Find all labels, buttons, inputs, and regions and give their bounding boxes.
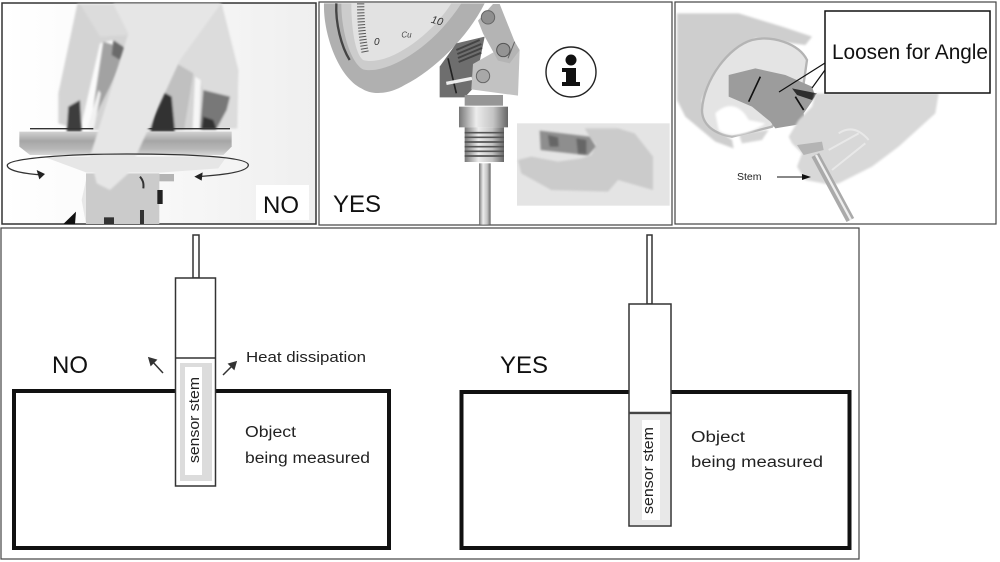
label: object being measured, right: [691, 429, 823, 471]
hands holding gauge: [677, 13, 812, 148]
hand gripping the case: [7, 4, 248, 224]
label: heat dissipation: Heat dissipation: [246, 349, 366, 366]
gauge case disc: [19, 129, 232, 173]
arrows: heat dissipation: [149, 358, 236, 375]
stem label and arrow: Stem: [737, 171, 762, 183]
object being measured, left: [14, 391, 389, 548]
panel: hands loosening the angle bolts: [675, 2, 996, 224]
stem housing: [63, 173, 174, 224]
sensor, full insertion: [629, 235, 671, 526]
callout: Loosen for Angle: Loosen for Angle: [832, 40, 988, 64]
right hand: [789, 93, 939, 185]
label NO: [256, 185, 309, 220]
adjustable bracket with bolts and spring: [440, 4, 520, 97]
icon: information symbol: [546, 47, 596, 97]
label NO: NO: [263, 192, 299, 219]
label: object being measured, left: Object: [245, 424, 297, 441]
label NO: NO: [52, 352, 88, 379]
gauge back with mechanism: [702, 39, 817, 137]
panel: wrench on the fitting (YES): [319, 2, 672, 225]
sensor, full insertion: sensor stem: [640, 427, 657, 514]
label: object being measured, left: being measured: [245, 450, 370, 467]
pointing finger: [90, 4, 221, 190]
panel: sensor immersion diagram: [1, 228, 859, 559]
object being measured, right: [462, 392, 850, 548]
threaded fitting and stem: [459, 95, 508, 225]
panel: hand turning the gauge case (NO): [2, 3, 316, 224]
label: object being measured, right: being measured: [691, 454, 823, 471]
gauge dial: 10: [430, 14, 444, 29]
gauge dial: [324, 3, 485, 93]
rotation arrow: [7, 154, 248, 181]
gauge dial: 0: [374, 37, 380, 48]
label YES: YES: [333, 191, 381, 218]
gauge dial: Cu: [401, 30, 412, 39]
wrench photo: [517, 123, 670, 206]
label YES: YES: [500, 352, 548, 379]
label: object being measured, right: Object: [691, 429, 746, 446]
sensor, shallow insertion: sensor stem: [186, 377, 203, 463]
label: object being measured, left: [245, 424, 370, 467]
stem rod: [797, 142, 851, 220]
callout: Loosen for Angle: [779, 11, 990, 93]
stem label and arrow: [737, 171, 811, 183]
sensor, shallow insertion: [175, 235, 216, 486]
